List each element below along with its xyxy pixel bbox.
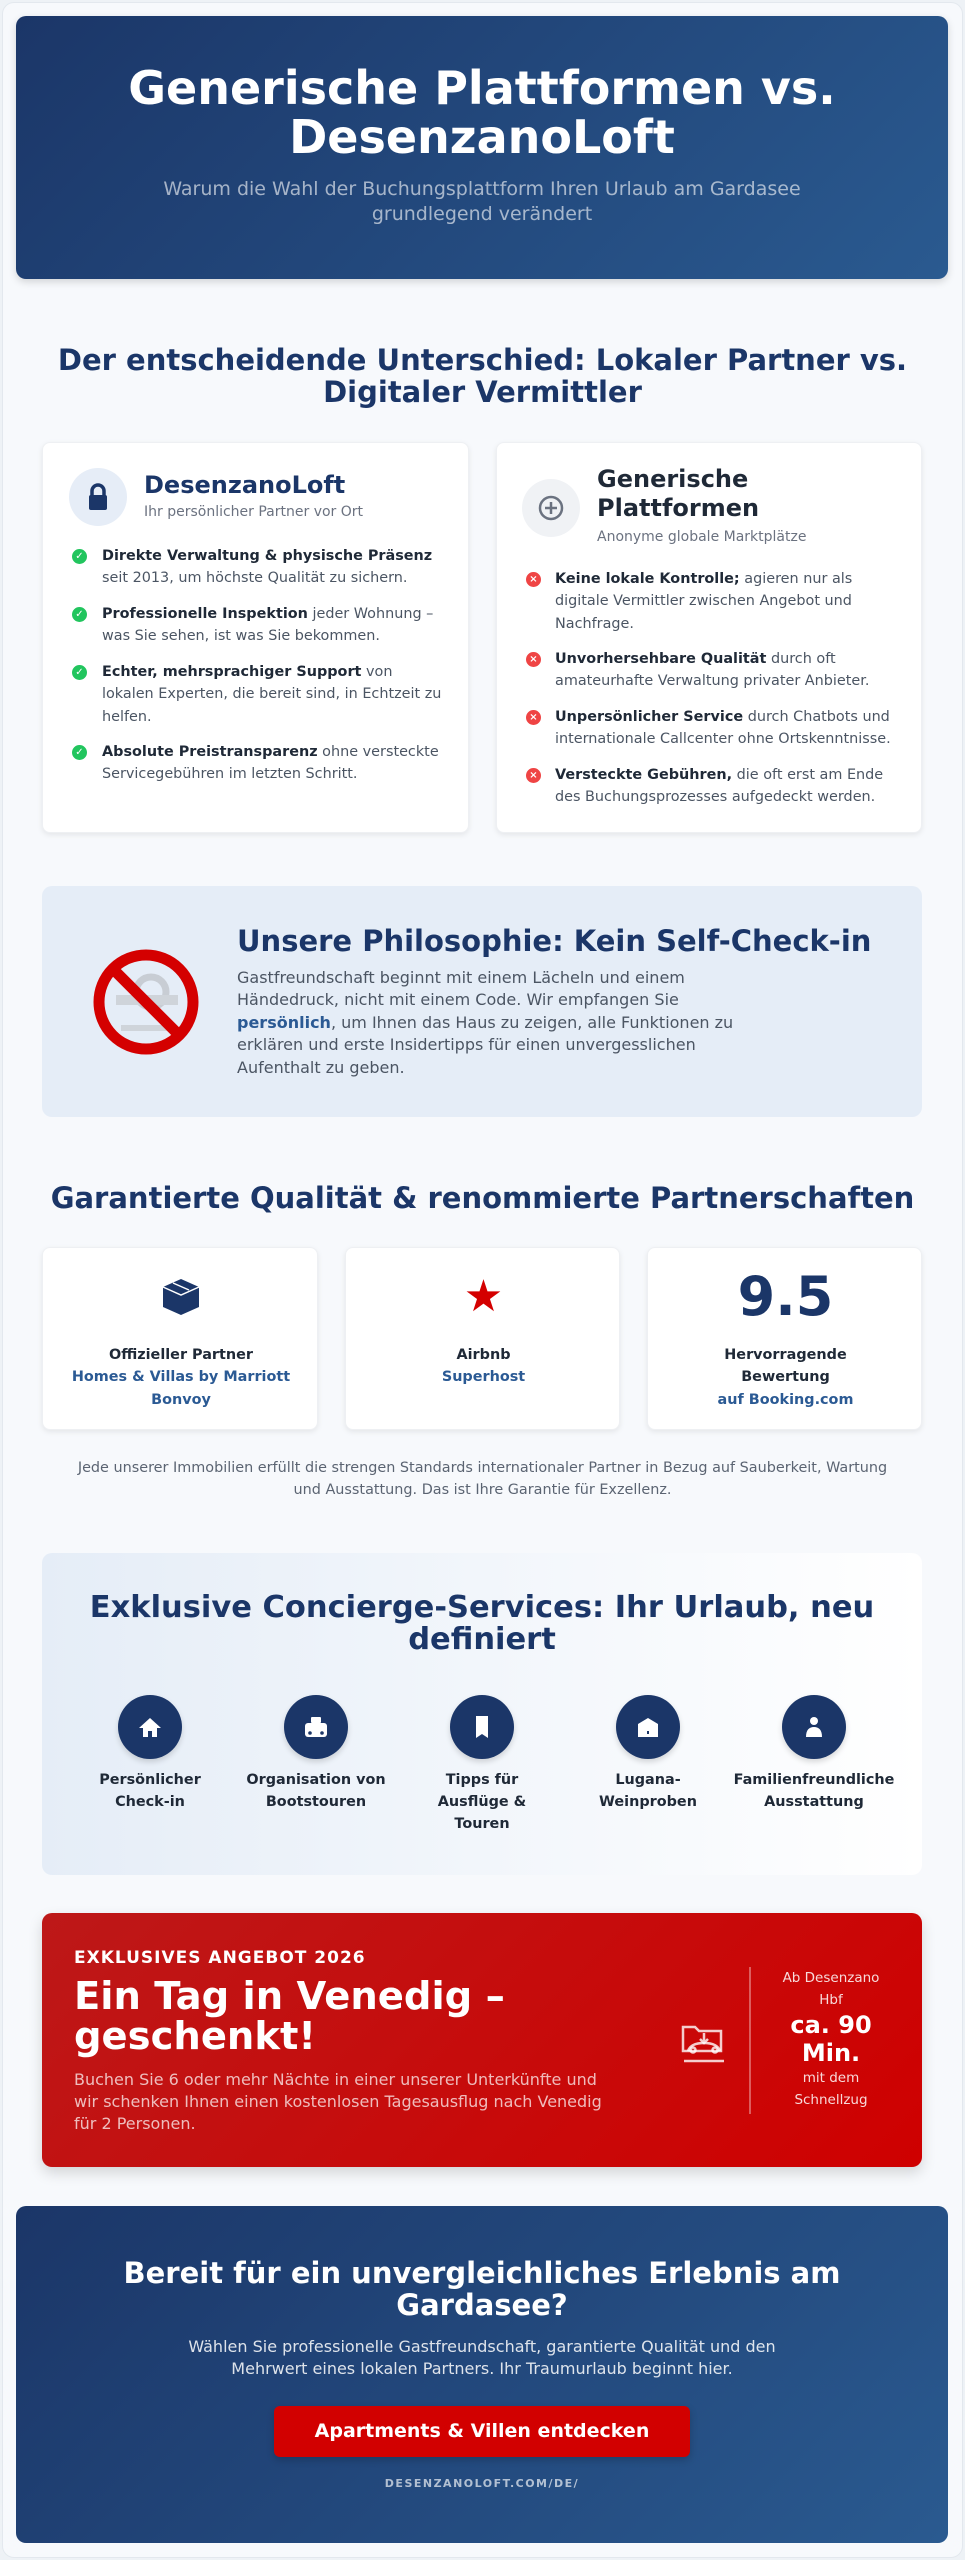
label: Homes & Villas by Marriott: [72, 1369, 290, 1385]
icon: no self check-in: [94, 950, 198, 1054]
list: advantages: Absolute Preistransparenz ohne versteckte Servicegebühren im letzten Schritt.: [102, 744, 439, 782]
icon: box: [163, 1279, 199, 1315]
service labels: Ausflüge &: [438, 1794, 526, 1810]
cta text: Mehrwert eines lokalen Partners. Ihr Traumurlaub beginnt hier.: [231, 2359, 733, 2378]
header: [16, 16, 948, 279]
icon: star: ★: [464, 1271, 503, 1322]
list: disadvantages: [526, 571, 891, 805]
service labels: Check-in: [115, 1794, 185, 1810]
list: advantages: [72, 548, 441, 782]
label: Hervorragende: [724, 1347, 847, 1363]
concierge title: [90, 1590, 874, 1657]
title: [128, 61, 836, 164]
url: DESENZANOLOFT.COM/DE/: [385, 2477, 579, 2490]
service labels: Ausstattung: [764, 1794, 864, 1810]
service labels: Persönlicher: [99, 1772, 201, 1788]
footnote: Jede unserer Immobilien erfüllt die strengen Standards internationaler Partner in Bezug auf Sauberkeit, Wartung: [78, 1460, 887, 1476]
heading: difference: [58, 343, 907, 409]
concierge title: Exklusive Concierge-Services: Ihr Urlaub, neu: [90, 1590, 874, 1625]
card title: Generische: [597, 465, 748, 493]
list: advantages: lokalen Experten, die bereit sind, in Echtzeit zu helfen.: [102, 686, 441, 725]
icon: bookmark: [450, 1695, 514, 1759]
card subtitle: Anonyme globale Marktplätze: [597, 529, 806, 545]
footnote: und Ausstattung. Das ist Ihre Garantie für Exzellenz.: [294, 1482, 671, 1498]
travel time: ca. 90: [790, 2011, 872, 2039]
cta title: Gardasee?: [396, 2288, 568, 2322]
button: Apartments & Villen entdecken: [315, 2420, 649, 2442]
card title: DesenzanoLoft: [144, 471, 345, 499]
card subtitle: Ihr persönlicher Partner vor Ort: [144, 504, 363, 520]
list: advantages: ✓: [75, 747, 84, 758]
button: [274, 2406, 690, 2457]
label: auf Booking.com: [718, 1392, 853, 1408]
card title: Plattformen: [597, 494, 759, 522]
service labels: Weinproben: [599, 1794, 697, 1810]
cta title: [124, 2256, 840, 2322]
label: Superhost: [442, 1369, 525, 1385]
footnote: [77, 1460, 887, 1498]
divider: [749, 1967, 751, 2114]
icon: plus circle: [522, 479, 580, 537]
service labels: Bootstouren: [266, 1794, 366, 1810]
label: [718, 1347, 853, 1408]
service labels: [99, 1772, 894, 1832]
travel time: Min.: [802, 2039, 860, 2067]
travel time: mit dem: [803, 2070, 859, 2086]
list: disadvantages: ×: [529, 770, 538, 781]
label: Bewertung: [741, 1369, 830, 1385]
panel: Venice offer: [42, 1913, 922, 2167]
panel: Airbnb: [345, 1247, 620, 1430]
list: advantages: Professionelle Inspektion jeder Wohnung – was Sie sehen, ist was Sie bekommen.: [102, 606, 433, 644]
list: disadvantages: Keine lokale Kontrolle; agieren nur als digitale Vermittler zwischen Angebot und Nachfrage.: [555, 571, 852, 632]
panel: Booking: [647, 1247, 922, 1430]
offer title: geschenkt!: [74, 2014, 316, 2059]
philosophy text: Gastfreundschaft beginnt mit einem Lächeln und einem Händedruck, nicht mit einem Code. Wir empfangen Sie persönlich, um Ihnen das Haus zu zeigen, alle Funktionen zu erklären und erste Insidertipps für einen unvergesslichen Aufenthalt zu geben.: [237, 968, 733, 1077]
icon: lock: [69, 468, 127, 526]
card title: [597, 465, 759, 522]
icon: boat: [284, 1695, 348, 1759]
list: disadvantages: ×: [529, 712, 538, 723]
offer title: [74, 1974, 505, 2059]
subtitle: [163, 178, 801, 225]
service labels: Familienfreundliche: [734, 1772, 894, 1788]
travel time: Schnellzug: [794, 2092, 868, 2108]
concierge title: definiert: [408, 1622, 556, 1657]
list: disadvantages: Versteckte Gebühren, die oft erst am Ende des Buchungsprozesses aufgedeckt werden.: [555, 767, 883, 805]
list: advantages: ✓: [75, 667, 84, 678]
travel time: Hbf: [819, 1992, 843, 2008]
kicker: EXKLUSIVES ANGEBOT 2026: [74, 1948, 366, 1968]
heading: quality: Garantierte Qualität & renommierte Partnerschaften: [51, 1181, 914, 1215]
offer title: Ein Tag in Venedig –: [74, 1974, 505, 2019]
panel: philosophy: [42, 886, 922, 1117]
icon: family: [782, 1695, 846, 1759]
panel: Marriott: [42, 1247, 318, 1430]
icon: train folder: [682, 2026, 724, 2062]
subtitle: grundlegend verändert: [372, 203, 592, 225]
travel time: Ab Desenzano: [783, 1970, 879, 1986]
rating number: 9.5: [738, 1265, 833, 1328]
service labels: Organisation von: [246, 1772, 386, 1788]
cta text: Wählen Sie professionelle Gastfreundschaft, garantierte Qualität und den: [188, 2337, 776, 2356]
panel: concierge: [42, 1553, 922, 1875]
philosophy title: Unsere Philosophie: Kein Self-Check-in: [237, 924, 871, 958]
heading: difference: Der entscheidende Unterschied: Lokaler Partner vs.: [58, 343, 907, 377]
label: Bonvoy: [151, 1392, 211, 1408]
subtitle: Warum die Wahl der Buchungsplattform Ihren Urlaub am Gardasee: [163, 178, 801, 200]
panel: call to action: [16, 2206, 948, 2543]
offer text: wir schenken Ihnen einen kostenlosen Tagesausflug nach Venedig: [74, 2092, 602, 2111]
heading: difference: Digitaler Vermittler: [323, 375, 642, 409]
list: disadvantages: ×: [529, 654, 538, 665]
cta text: [188, 2337, 776, 2378]
offer text: [74, 2070, 602, 2133]
list: disadvantages: Unvorhersehbare Qualität durch oft amateurhafte Verwaltung privater Anbieter.: [555, 651, 869, 689]
service labels: Touren: [454, 1816, 510, 1832]
service labels: Lugana-: [615, 1772, 681, 1788]
panel: DesenzanoLoft: [42, 442, 469, 833]
list: advantages: Echter, mehrsprachiger Support von: [102, 664, 392, 680]
list: advantages: Direkte Verwaltung & physische Präsenz seit 2013, um höchste Qualität zu sichern.: [102, 548, 432, 586]
icon: home: [118, 1695, 182, 1759]
label: Airbnb: [456, 1347, 510, 1363]
icon: wine house: [616, 1695, 680, 1759]
title: Generische Plattformen vs.: [128, 61, 836, 115]
offer text: für 2 Personen.: [74, 2114, 196, 2133]
label: [442, 1347, 525, 1385]
cta title: Bereit für ein unvergleichliches Erlebnis am: [124, 2256, 840, 2290]
list: advantages: ✓: [75, 609, 84, 620]
offer text: Buchen Sie 6 oder mehr Nächte in einer unserer Unterkünfte und: [74, 2070, 597, 2089]
list: disadvantages: Unpersönlicher Service durch Chatbots und internationale Callcenter ohne Ortskenntnisse.: [555, 709, 891, 747]
label: Offizieller Partner: [109, 1347, 253, 1363]
list: advantages: ✓: [75, 551, 84, 562]
travel time: [782, 1970, 879, 2108]
panel: generic platforms: [496, 442, 922, 833]
title: DesenzanoLoft: [289, 110, 675, 164]
label: [72, 1347, 290, 1408]
list: disadvantages: ×: [529, 574, 538, 585]
service labels: Tipps für: [446, 1772, 518, 1788]
